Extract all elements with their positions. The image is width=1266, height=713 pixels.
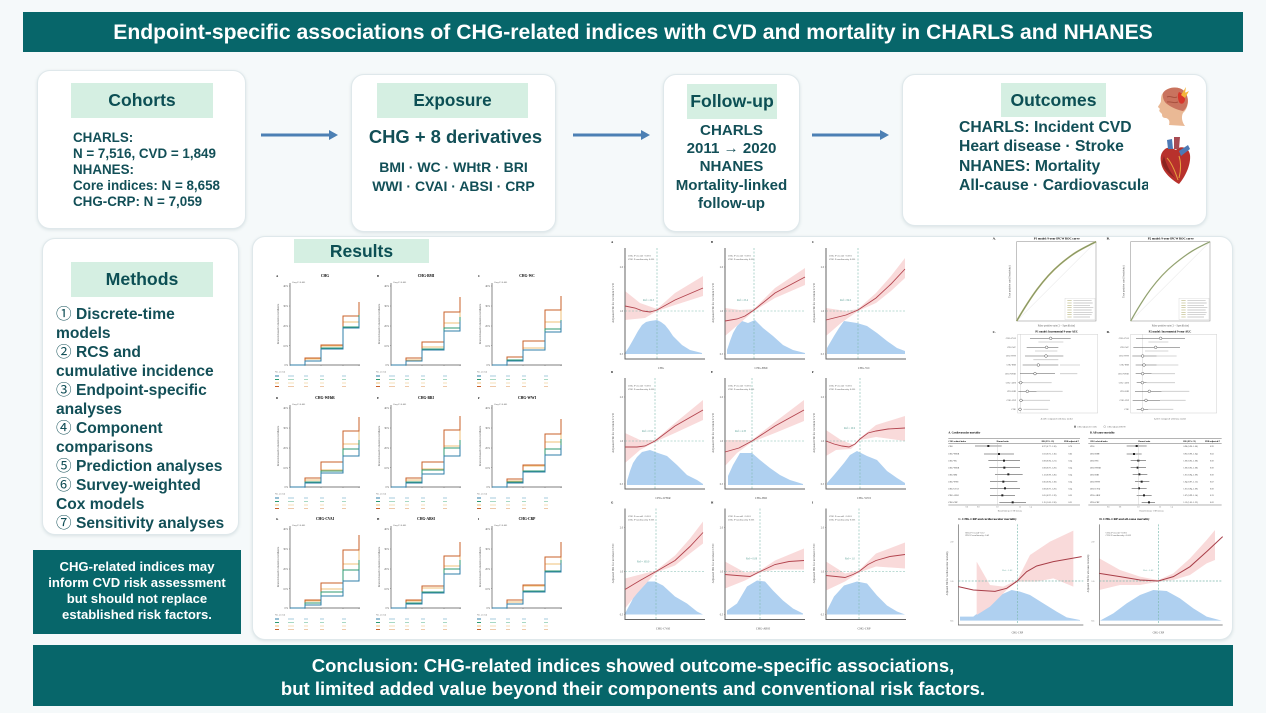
chart: all-cause mortality forest: 1.4 xyxy=(1171,507,1173,509)
chart: cardiovascular mortality forest: 1.05 (0.97–1.19) xyxy=(1042,494,1057,497)
text: follow-up details: CHARLS xyxy=(700,122,763,139)
chart: P1 ROC curve: P1 model: 9-year IPCW ROC curve xyxy=(1034,237,1080,241)
chart: cumulative incidence CHG-WWI xyxy=(477,396,562,508)
chart: RCS CHG-BRI: CHG-BRI xyxy=(755,496,767,500)
icon: head with brain xyxy=(1158,87,1189,126)
chart: cumulative incidence CHG-BMI: Gray P<0.001 xyxy=(393,281,407,284)
chart: cumulative incidence CHG: A xyxy=(276,274,279,278)
chart group: ROC and incremental AUC (coordinates scaled) xyxy=(993,237,1217,429)
chart: cumulative incidence CHG-WHtR: CHG-WHtR xyxy=(315,396,335,400)
chart: cumulative incidence CHG-CRP: CHG-CRP xyxy=(519,517,536,521)
chart: cardiovascular mortality forest: 1.15 (1.00–1.30) xyxy=(1042,501,1057,504)
conclusion banner: but limited added value beyond their components and conventional risk factors. xyxy=(281,678,985,699)
chart: all-cause mortality forest: 1.13 (1.05–1.22) xyxy=(1183,501,1198,504)
text: cohort sizes: NHANES: xyxy=(73,162,134,177)
chart: cardiovascular mortality forest: A. Cardiovascular mortality xyxy=(948,431,981,434)
chart: P2 incremental AUC forest xyxy=(1107,329,1217,420)
title banner: Endpoint-specific associations of CHG-related indices with CVD and mortality in CHARLS and NHANES xyxy=(113,21,1153,44)
chart: P1 incremental AUC forest: P1 model: Incremental 9-year AUC xyxy=(1035,329,1078,333)
text: follow-up details: Mortality-linked xyxy=(676,177,787,194)
chart: cumulative incidence CHG-BRI: CHG-BRI xyxy=(418,396,434,400)
chart: cumulative incidence CHG-CVAI: CHG-CVAI xyxy=(316,517,335,521)
text: cohort sizes: Core indices: N = 8,658 xyxy=(73,178,220,193)
chart: cumulative incidence CHG-CVAI xyxy=(275,517,360,630)
chart: cardiovascular mortality forest: 0.24 xyxy=(1068,488,1073,490)
chart: RCS CHG-CVAI: Ref = 100.0 xyxy=(637,560,650,564)
chart: P1 ROC curve xyxy=(993,237,1096,328)
chart: P1 incremental AUC forest: CHG-WHtR xyxy=(1005,373,1017,375)
chart: all-cause mortality forest: 1.0 xyxy=(1137,507,1140,509)
chart: P2 ROC curve xyxy=(1107,237,1210,328)
chart: cardiovascular mortality forest: 0.24 xyxy=(1068,467,1073,469)
chart: all-cause mortality forest: Hazard ratio xyxy=(1138,441,1150,443)
chart: RCS CHG-WHtR xyxy=(611,370,705,500)
chart: cardiovascular mortality forest: CHG-related index xyxy=(948,441,967,443)
text: cohort sizes: N = 7,516, CVD = 1,849 xyxy=(73,146,216,161)
chart: RCS CHG-WC: CHG-WC xyxy=(858,366,870,370)
icon: heart xyxy=(1160,137,1190,184)
heading: methods xyxy=(71,262,213,297)
chart: cardiovascular mortality forest xyxy=(948,431,1080,513)
chart: cardiovascular mortality forest: Hazard ratio per 1 SD increase xyxy=(998,511,1022,513)
heading: outcomes: Outcomes xyxy=(1010,90,1097,110)
chart: cardiovascular mortality forest: CHG-BRI xyxy=(948,474,957,476)
chart: cumulative incidence CHG-BMI: CHG-BMI xyxy=(418,274,435,278)
chart: cardiovascular mortality forest: 1.08 (0.97–1.20) xyxy=(1042,487,1057,490)
chart: RCS CHG-CRP: I xyxy=(812,500,814,504)
chart: cumulative incidence CHG-WHtR: D xyxy=(276,396,279,400)
chart: RCS CHG-WC: Ref = 84.0 xyxy=(840,299,852,302)
chart: cardiovascular mortality forest: 0.97 (0.77–1.18) xyxy=(1042,445,1057,448)
chart: P2 ROC curve: B. xyxy=(1107,237,1110,241)
chart: cardiovascular mortality forest: CHG-WWI xyxy=(948,481,959,483)
arrow: cohorts to exposure xyxy=(261,130,338,140)
chart: CHG-CRP and all-cause mortality xyxy=(1087,517,1223,634)
text: derivative list: BMI · WC · WHtR · BRI xyxy=(379,159,528,175)
chart: all-cause mortality forest: 1.07 (0.99–1.14) xyxy=(1183,494,1198,497)
chart: RCS CHG-BMI: B xyxy=(711,240,713,244)
chart: P1 ROC curve: A. xyxy=(993,237,996,241)
chart: P1 incremental AUC forest: CHG xyxy=(1011,409,1016,411)
chart: P1 ROC curve: False positive rate (1 – Specificity) xyxy=(1038,325,1075,328)
chart: all-cause mortality forest: 1.00 (0.93–1.08) xyxy=(1183,466,1198,469)
chart: RCS CHG-BMI xyxy=(711,240,805,370)
chart: cumulative incidence CHG-BMI xyxy=(376,274,461,386)
panel: follow-up xyxy=(663,74,800,232)
text: outcome list xyxy=(959,119,1148,194)
chart: cardiovascular mortality forest: CHG-ABSI xyxy=(948,494,959,497)
chart: cumulative incidence CHG-CRP: I xyxy=(478,517,480,521)
chart: CHG-CRP and cardiovascular mortality: 1.0 xyxy=(950,580,954,583)
chart: CHG-CRP and all-cause mortality: 1.0 xyxy=(1091,580,1095,583)
chart: all-cause mortality forest: 0.92 xyxy=(1210,488,1214,490)
chart: CHG-CRP and all-cause mortality: CHG P-overall <0.001 xyxy=(1106,531,1128,534)
chart: all-cause mortality forest: CHG-ABSI xyxy=(1090,494,1100,497)
chart: RCS CHG-WWI: CHG-WWI xyxy=(857,496,871,500)
chart: cumulative incidence CHG-ABSI: Gray P<0.001 xyxy=(393,524,407,527)
chart: all-cause mortality forest: 0.98 (0.90–1.06) xyxy=(1183,445,1198,448)
text: follow-up details: NHANES xyxy=(700,158,763,175)
chart: cumulative incidence CHG-WHtR xyxy=(275,396,360,508)
chart: P1 incremental AUC forest: CHG-BMI xyxy=(1007,365,1016,367)
text: methods list: ① Discrete-time xyxy=(56,302,175,324)
chart: P2 incremental AUC forest: CHG-BMI xyxy=(1120,365,1129,367)
chart: all-cause mortality forest: CHG-WC xyxy=(1090,461,1099,463)
chart: all-cause mortality forest: 0.92 xyxy=(1210,467,1214,469)
chart: all-cause mortality forest: CHG-CRP xyxy=(1090,502,1100,504)
chart: RCS CHG: Ref = 22.5 xyxy=(643,299,655,302)
chart: P2 incremental AUC forest: CHG-WWI xyxy=(1119,356,1129,358)
heading: outcomes xyxy=(1001,83,1106,117)
text: cohort sizes xyxy=(73,130,220,209)
chart: CHG-CRP and all-cause mortality: 2.0 xyxy=(1091,541,1095,544)
panel: cohorts xyxy=(37,70,246,229)
chart: all-cause mortality forest: FDR-adjusted P xyxy=(1205,441,1221,443)
chart: RCS CHG: CHG xyxy=(658,366,665,370)
chart: all-cause mortality forest: 0.92 xyxy=(1210,446,1214,448)
chart: cardiovascular mortality forest: 1.08 (0.96–1.21) xyxy=(1042,460,1057,463)
chart: P2 incremental AUC forest: ΔAUC compared with base model xyxy=(1154,417,1186,420)
chart: cumulative incidence CHG-WWI: CHG-WWI xyxy=(518,396,537,400)
chart: CHG-CRP and cardiovascular mortality: C. CHG-CRP and cardiovascular mortality xyxy=(958,517,1017,521)
callout: interpretation note xyxy=(33,550,241,634)
callout: interpretation note: but should not replace xyxy=(67,591,207,606)
heading: exposure: Exposure xyxy=(413,90,492,110)
chart: cardiovascular mortality forest: 1.06 (0.96–1.18) xyxy=(1042,480,1057,483)
heading: follow-up: Follow-up xyxy=(690,91,774,111)
chart: P2 incremental AUC forest: CHG-BRI xyxy=(1120,391,1129,393)
chart: cardiovascular mortality forest: 1.13 (0.99–1.26) xyxy=(1042,473,1057,476)
chart: cardiovascular mortality forest: 0.24 xyxy=(1068,461,1073,463)
chart: CHG-CRP and cardiovascular mortality: 0.5 xyxy=(950,619,954,622)
heading: follow-up xyxy=(687,84,777,119)
chart: P2 incremental AUC forest: CHG-WHtR xyxy=(1118,373,1130,375)
chart: cumulative incidence CHG-CVAI: Gray P<0.001 xyxy=(292,524,306,527)
text: methods list: ⑤ Prediction analyses xyxy=(56,454,222,476)
chart: RCS CHG-CRP: Ref = 1.0 xyxy=(845,558,855,560)
chart: all-cause mortality forest: 0.92 xyxy=(1210,474,1214,476)
chart: cardiovascular mortality forest: 1.4 xyxy=(1030,507,1032,509)
chart: P2 incremental AUC forest: CHG xyxy=(1124,409,1129,411)
heading: methods: Methods xyxy=(106,269,178,289)
text: methods list: ④ Component xyxy=(56,416,163,438)
chart: cumulative incidence CHG-WWI: Gray P<0.001 xyxy=(494,403,508,406)
chart: RCS CHG-CRP xyxy=(812,500,906,630)
text: methods list: ② RCS and xyxy=(56,340,141,362)
conclusion banner: Conclusion: CHG-related indices showed outcome-specific associations, xyxy=(312,655,954,676)
chart: P2 ROC curve: True positive rate (Sensitivity) xyxy=(1123,265,1126,298)
chart: cardiovascular mortality forest: HR (95% CI) xyxy=(1042,440,1054,443)
chart: cardiovascular mortality forest: CHG-CVAI xyxy=(948,487,959,490)
chart: all-cause mortality forest: 0.92 xyxy=(1210,461,1214,463)
chart: RCS CHG-CVAI: CHG-CVAI xyxy=(656,626,670,630)
text: CHG plus derivatives: CHG + 8 derivatives xyxy=(369,126,542,147)
chart: cardiovascular mortality forest: CHG-WHtR xyxy=(948,467,960,469)
chart: cardiovascular mortality forest: 0.35 xyxy=(1068,495,1072,497)
chart: P1 incremental AUC forest: CHG-WC xyxy=(1007,347,1017,349)
panel: results xyxy=(252,236,1233,640)
chart: cardiovascular mortality forest: CHG-WHtR xyxy=(948,454,960,456)
chart: cardiovascular mortality forest: 1.03 (0.91–1.16) xyxy=(1042,453,1057,456)
chart: all-cause mortality forest: 1.01 (0.94–1.09) xyxy=(1183,473,1198,476)
chart: RCS CHG-WWI: F xyxy=(812,370,814,374)
chart: all-cause mortality forest: 1.2 xyxy=(1159,507,1161,509)
chart: cardiovascular mortality forest: FDR-adjusted P xyxy=(1064,441,1080,443)
chart: P1 incremental AUC forest: CHG-ABSI xyxy=(1006,381,1016,384)
chart: P1 incremental AUC forest: CHG-CRP xyxy=(1007,400,1017,402)
chart: P1 incremental AUC forest: C. xyxy=(993,330,996,334)
chart: cardiovascular mortality forest: 1.2 xyxy=(1019,507,1021,509)
chart: cardiovascular mortality forest: 0.6 xyxy=(966,507,968,509)
chart: P1 incremental AUC forest xyxy=(993,329,1098,420)
chart: P1 incremental AUC forest: CHG-CVAI xyxy=(1006,337,1016,340)
chart: RCS CHG-WWI: Ref = 10.9 xyxy=(844,427,856,430)
heading: cohorts: Cohorts xyxy=(108,90,176,110)
chart: CHG-CRP and cardiovascular mortality: CHG P-nonlinearity=0.42 xyxy=(965,534,990,537)
chart: RCS CHG-CVAI: G xyxy=(611,500,614,504)
chart: CHG-CRP and all-cause mortality: Ref = 1.02 xyxy=(1143,569,1154,572)
panel: exposure xyxy=(351,74,556,232)
chart: cumulative incidence CHG: CHG xyxy=(321,274,329,278)
chart: cumulative incidence CHG xyxy=(275,274,360,386)
chart: all-cause mortality forest: 0.95 (0.90–1.04) xyxy=(1183,453,1198,456)
chart: cardiovascular mortality forest: 1.0 xyxy=(996,507,999,509)
chart: all-cause mortality forest: 0.63 xyxy=(1210,454,1214,456)
chart: cardiovascular mortality forest: 0.21 xyxy=(1068,502,1072,504)
chart: cardiovascular mortality forest: 0.63 xyxy=(1068,454,1072,456)
chart: CHG-CRP and all-cause mortality: CHG P-nonlinearity=0.003 xyxy=(1106,534,1132,537)
chart: cardiovascular mortality forest: 1.08 (0.97–1.20) xyxy=(1042,466,1057,469)
chart: cumulative incidence CHG-WWI: F xyxy=(478,396,480,400)
text: follow-up details: follow-up xyxy=(698,195,765,212)
legend: adjusted AUC markers: CHG-adjusted IPCW xyxy=(1107,427,1127,429)
chart: RCS CHG-WHtR: D xyxy=(611,370,614,374)
text: derivative list: WWI · CVAI · ABSI · CRP xyxy=(372,178,535,194)
chart: RCS CHG-ABSI: H xyxy=(711,500,714,504)
chart: all-cause mortality forest: 0.67 xyxy=(1210,481,1215,483)
chart: RCS CHG-ABSI: Ref = 0.08 xyxy=(746,558,758,560)
chart: RCS CHG-ABSI: CHG-ABSI xyxy=(756,626,770,630)
chart: RCS CHG-WC xyxy=(812,240,906,370)
chart: RCS CHG xyxy=(611,240,705,370)
chart: RCS CHG-WWI xyxy=(812,370,906,500)
arrow: exposure to follow-up xyxy=(573,130,650,140)
chart: cumulative incidence CHG-BRI: Gray P<0.001 xyxy=(393,403,407,406)
chart: all-cause mortality forest: CHG-BRI xyxy=(1090,474,1099,476)
chart: RCS CHG-CVAI xyxy=(611,500,705,630)
chart: cumulative incidence CHG-ABSI: CHG-ABSI xyxy=(417,517,435,521)
chart: all-cause mortality forest: 0.23 xyxy=(1210,495,1214,497)
chart: cumulative incidence CHG-WC xyxy=(477,274,562,386)
chart: P1 incremental AUC forest: CHG-BRI xyxy=(1007,391,1016,393)
chart: all-cause mortality forest: 0.6 xyxy=(1107,507,1110,509)
chart: cardiovascular mortality forest: 0.8 xyxy=(977,507,980,509)
chart: all-cause mortality forest: CHG-WWI xyxy=(1090,481,1100,483)
chart: P2 incremental AUC forest: CHG-CRP xyxy=(1120,400,1130,402)
chart: P1 incremental AUC forest: CHG-WWI xyxy=(1006,356,1016,358)
arrow: follow-up to outcomes xyxy=(812,130,889,140)
chart: CHG-CRP and cardiovascular mortality xyxy=(946,517,1083,634)
chart: RCS CHG-WHtR: Ref = 0.53 xyxy=(642,430,654,433)
chart: RCS CHG-BMI: Ref = 25.4 xyxy=(737,299,749,302)
heading: results: Results xyxy=(330,241,393,261)
legend: adjusted AUC markers xyxy=(1074,426,1127,429)
chart: RCS CHG-WHtR: CHG-WHtR xyxy=(655,496,671,500)
text: methods list: Cox models xyxy=(56,496,144,513)
chart: CHG-CRP and cardiovascular mortality: Adjusted HR for cardiovascular mortality xyxy=(946,551,949,595)
chart: P2 incremental AUC forest: P2 model: Incremental 9-year AUC xyxy=(1149,329,1191,333)
chart: all-cause mortality forest: B. All-cause mortality xyxy=(1090,431,1115,434)
chart: all-cause mortality forest: 1.01 (0.94–1.09) xyxy=(1183,487,1198,490)
legend: adjusted AUC markers: CHG-adjusted C-AUC xyxy=(1077,426,1098,429)
chart: cardiovascular mortality forest: CHG xyxy=(948,446,953,448)
chart: CHG-CRP and cardiovascular mortality: CHG P-overall=0.12 xyxy=(965,531,985,534)
chart: cumulative incidence CHG-CRP: Gray P<0.001 xyxy=(494,524,508,527)
chart: cardiovascular mortality forest: 0.24 xyxy=(1068,481,1073,483)
chart: RCS CHG-BRI: Ref = 4.35 xyxy=(735,430,747,433)
chart: CHG-CRP and all-cause mortality: CHG-CRP xyxy=(1153,631,1165,634)
chart: cumulative incidence CHG-ABSI xyxy=(376,517,461,630)
chart: CHG-CRP and all-cause mortality: 0.5 xyxy=(1091,619,1095,622)
chart: all-cause mortality forest: 1.04 (0.97–1.12) xyxy=(1183,480,1198,483)
chart: CHG-CRP and all-cause mortality: D. CHG-CRP and all-cause mortality xyxy=(1099,517,1150,521)
text: cohort sizes: CHG-CRP: N = 7,059 xyxy=(73,194,202,209)
chart: all-cause mortality forest xyxy=(1088,431,1222,513)
heading: cohorts xyxy=(71,83,213,118)
chart: cumulative incidence CHG-WC: Gray P<0.001 xyxy=(494,281,508,284)
chart: cumulative incidence CHG-BMI: B xyxy=(377,274,379,278)
chart: CHG-CRP and cardiovascular mortality: CHG-CRP xyxy=(1012,631,1024,634)
text: outcome list: Heart disease · Stroke xyxy=(959,138,1124,155)
text: methods list: analyses xyxy=(56,401,122,418)
text: cohort sizes: CHARLS: xyxy=(73,130,133,145)
chart: cardiovascular mortality forest: CHG-CRP xyxy=(948,502,958,504)
chart: all-cause mortality forest: 1.00 (0.93–1.08) xyxy=(1183,460,1198,463)
chart: P2 incremental AUC forest: CHG-ABSI xyxy=(1119,381,1129,384)
text: methods list: comparisons xyxy=(56,439,153,456)
chart: all-cause mortality forest: CHG-WHtR xyxy=(1090,467,1101,469)
panel: outcomes xyxy=(902,74,1207,226)
chart: all-cause mortality forest: CHG-CVAI xyxy=(1090,487,1101,490)
callout: interpretation note: CHG-related indices may xyxy=(60,559,214,574)
chart: all-cause mortality forest: Hazard ratio per 1 SD increase xyxy=(1139,511,1164,513)
chart: all-cause mortality forest: CHG xyxy=(1090,446,1095,448)
chart: all-cause mortality forest: HR (95% CI) xyxy=(1183,440,1196,443)
panel: methods xyxy=(42,238,239,535)
text: methods list: ③ Endpoint-specific xyxy=(56,378,207,400)
text: methods list: ⑥ Survey-weighted xyxy=(56,473,201,495)
chart: P2 ROC curve: P2 model: 9-year IPCW ROC curve xyxy=(1148,237,1194,241)
chart: cumulative incidence CHG-ABSI: H xyxy=(377,517,380,521)
text: methods list xyxy=(56,302,224,533)
text: follow-up details xyxy=(676,122,787,212)
chart: P1 incremental AUC forest: ΔAUC compared with base model xyxy=(1041,417,1073,420)
chart: cardiovascular mortality forest: Hazard ratio xyxy=(997,441,1009,443)
chart: cardiovascular mortality forest: 0.70 xyxy=(1068,446,1072,448)
chart: RCS CHG-CRP: CHG-CRP xyxy=(857,626,871,630)
text: outcome list: CHARLS: Incident CVD xyxy=(959,119,1132,136)
heading: exposure xyxy=(377,83,528,118)
heading: results xyxy=(294,239,429,263)
chart: cumulative incidence CHG-BRI xyxy=(376,396,461,508)
chart: RCS CHG-WC: C xyxy=(812,240,814,244)
chart: RCS CHG-BMI: CHG-BMI xyxy=(754,366,768,370)
chart: cumulative incidence CHG-WC: C xyxy=(478,274,480,278)
chart: P2 incremental AUC forest: D. xyxy=(1107,330,1110,334)
chart: CHG-CRP and cardiovascular mortality: Ref = 1.02 xyxy=(1002,569,1013,572)
chart: P1 ROC curve: True positive rate (Sensitivity) xyxy=(1009,265,1012,298)
chart: cumulative incidence CHG-CRP xyxy=(477,517,562,630)
chart: all-cause mortality forest: 0.02 xyxy=(1210,502,1214,504)
callout: interpretation note: established risk factors. xyxy=(62,607,212,622)
chart: P2 incremental AUC forest: CHG-WC xyxy=(1120,347,1130,349)
chart: RCS CHG-ABSI xyxy=(711,500,805,630)
chart: all-cause mortality forest: CHG-related index xyxy=(1090,441,1109,443)
text: methods list: cumulative incidence xyxy=(56,363,214,380)
chart: all-cause mortality forest: CHG-BMI xyxy=(1090,454,1100,456)
chart group: mortality forests and curves (coordinates scaled) xyxy=(946,431,1223,634)
chart: cumulative incidence CHG-WHtR: Gray P<0.001 xyxy=(292,403,306,406)
text: methods list: ⑦ Sensitivity analyses xyxy=(56,511,224,533)
text: follow-up details: 2011 → 2020 xyxy=(687,140,776,157)
text: methods list: models xyxy=(56,325,111,342)
chart: P2 incremental AUC forest: CHG-CVAI xyxy=(1119,337,1129,340)
chart: cardiovascular mortality forest: CHG-WC xyxy=(948,461,958,463)
conclusion banner xyxy=(33,645,1233,706)
chart: cumulative incidence CHG-WC: CHG-WC xyxy=(519,274,535,278)
chart: cardiovascular mortality forest: 0.24 xyxy=(1068,474,1073,476)
chart: cumulative incidence CHG-BRI: E xyxy=(377,396,379,400)
title banner xyxy=(23,12,1243,52)
chart: RCS CHG-BRI xyxy=(711,370,805,500)
chart: P2 ROC curve: False positive rate (1 – Specificity) xyxy=(1152,325,1189,328)
chart: all-cause mortality forest: 0.8 xyxy=(1119,507,1121,509)
chart: CHG-CRP and all-cause mortality: Adjusted HR for all-cause mortality xyxy=(1087,554,1090,592)
chart: cumulative incidence CHG: Gray P<0.001 xyxy=(292,281,306,284)
chart: CHG-CRP and cardiovascular mortality: 2.0 xyxy=(950,541,954,544)
chart: cumulative incidence CHG-CVAI: G xyxy=(276,517,279,521)
text: outcome list: NHANES: Mortality xyxy=(959,158,1100,175)
callout: interpretation note: inform CVD risk assessment xyxy=(48,575,226,590)
chart: RCS CHG: A xyxy=(611,240,614,244)
text: derivative list xyxy=(372,159,535,194)
chart: RCS CHG-BRI: E xyxy=(711,370,713,374)
